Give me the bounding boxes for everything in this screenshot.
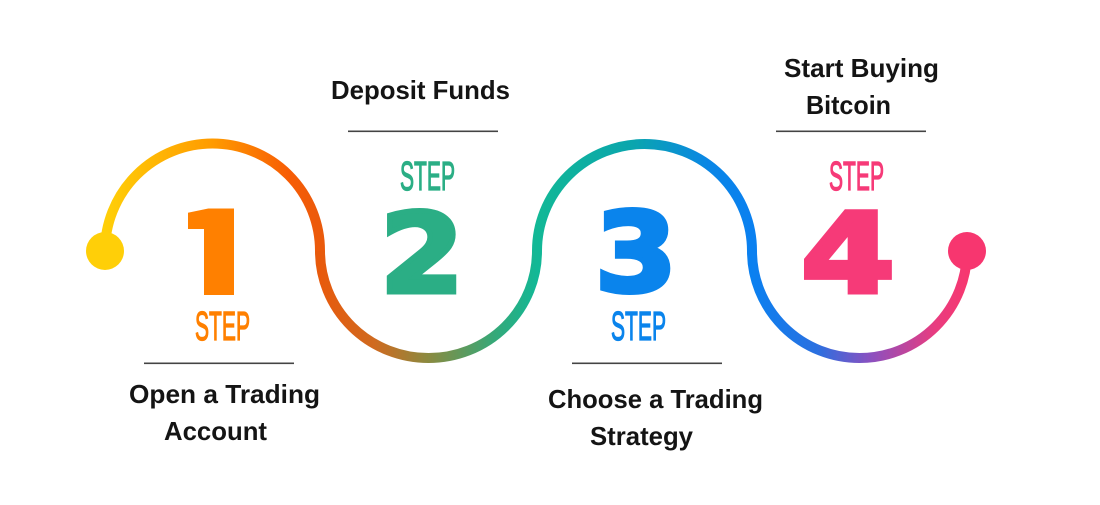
icon: start dot: [86, 232, 124, 270]
step 1 label: Account: [164, 416, 267, 446]
number 3: 3: [595, 189, 677, 317]
step 3 divider: [572, 362, 722, 364]
step 1 divider: [144, 362, 294, 364]
step 2 divider: [348, 130, 498, 132]
step 4 label: Bitcoin: [806, 90, 891, 120]
icon: end dot: [948, 232, 986, 270]
step 2 word: STEP: [400, 153, 455, 199]
step 3: [548, 189, 763, 451]
number 1: 1: [174, 190, 260, 335]
step 4: [776, 53, 939, 318]
step 1 label: Open a Trading: [129, 379, 320, 409]
number 2: 2: [380, 190, 464, 318]
step 3 word: STEP: [611, 303, 666, 349]
step 2 label: Deposit Funds: [331, 75, 510, 105]
step 4 label: [784, 53, 939, 120]
wave path connecting steps: [105, 144, 967, 358]
step 3 label: Strategy: [590, 421, 694, 451]
step 1 word: STEP: [195, 303, 250, 349]
step 1: [130, 208, 318, 440]
step 3 label: Choose a Trading: [548, 384, 763, 414]
step 4 word: STEP: [829, 153, 884, 199]
step 2: [331, 75, 510, 318]
step 4 label: Start Buying: [784, 53, 939, 83]
number 4: 4: [801, 190, 895, 318]
step 1 label: [129, 379, 320, 446]
step 4 divider: [776, 130, 926, 132]
step 3 label: [548, 384, 763, 451]
